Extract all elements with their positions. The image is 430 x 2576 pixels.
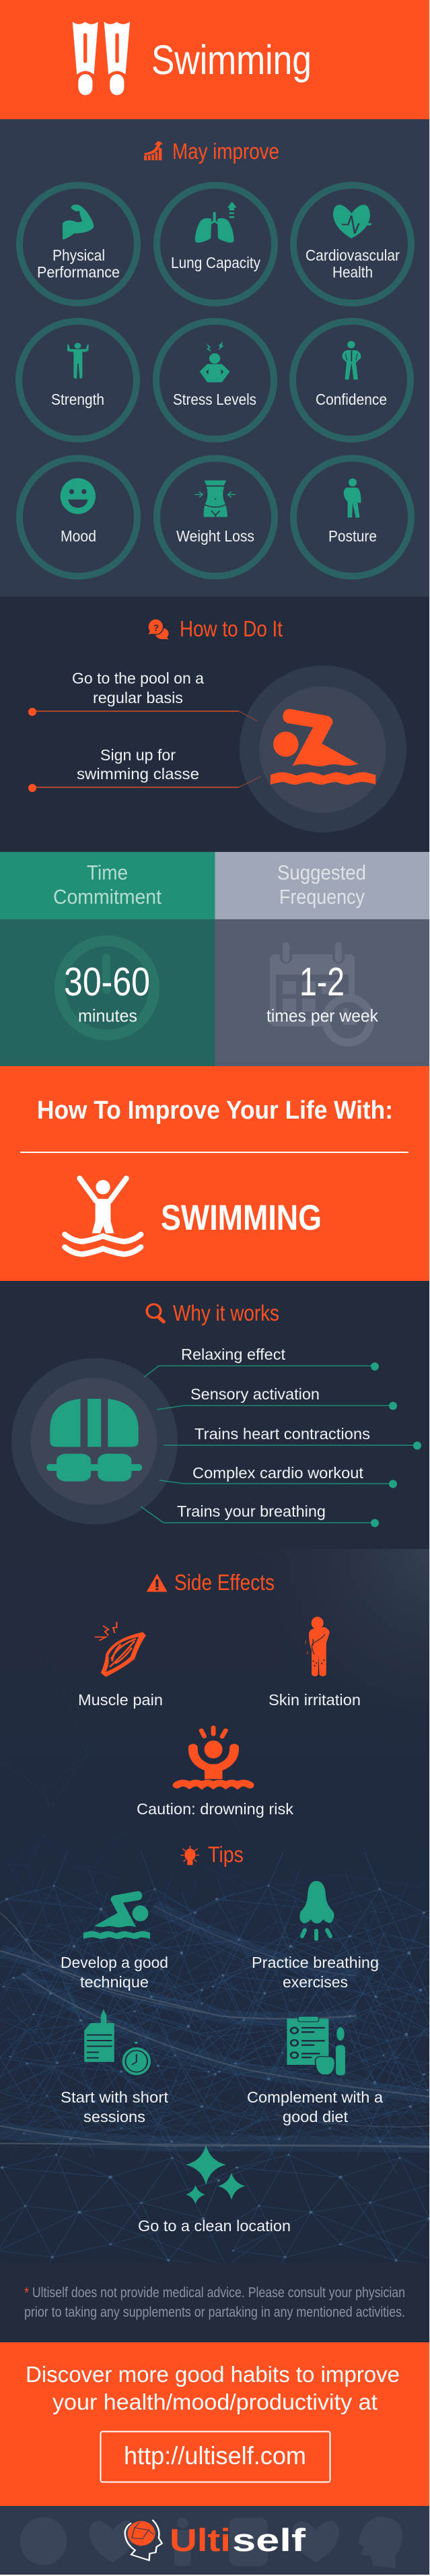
tip: technique <box>61 1891 168 1991</box>
panel: suggested frequency: 1-2 <box>299 960 345 1004</box>
panel: may improve <box>0 119 430 597</box>
panel: time commitment: Time <box>87 861 128 884</box>
step: classes: swimming classe <box>77 765 199 783</box>
label: swimming: SWIMMING <box>161 1198 322 1238</box>
panel: call to action: your health/mood/productivity at <box>52 2389 378 2414</box>
ring: lung capacity: Lung Capacity <box>171 254 260 271</box>
icon: swimmer <box>271 709 375 785</box>
tip: technique: technique <box>80 1973 149 1991</box>
ring: stress levels <box>156 321 274 439</box>
panel: how to do it <box>0 597 430 852</box>
ring: confidence <box>293 321 410 439</box>
heading: side effects: Side Effects <box>174 1570 275 1595</box>
panel: side effects and tips background <box>0 1549 430 2299</box>
heading: how to do it <box>148 616 283 641</box>
tip: short sessions <box>61 2009 169 2125</box>
heading: may improve <box>144 139 279 164</box>
panel: why it works <box>0 1281 430 1549</box>
panel: time commitment <box>0 852 215 1066</box>
panel: time commitment: Commitment <box>53 885 162 909</box>
item: trains your breathing: Trains your breathing <box>177 1502 326 1520</box>
ring: confidence: Confidence <box>316 391 387 408</box>
ring: mood <box>20 458 137 576</box>
concentric circles <box>240 665 406 832</box>
ring: cardiovascular health: Health <box>332 263 373 281</box>
tip: clean location <box>138 2145 291 2235</box>
heading: tips: Tips <box>208 1842 244 1867</box>
ring: cardiovascular health: Cardiovascular <box>306 246 400 264</box>
icon: calendar <box>270 941 370 1043</box>
icon: clock <box>60 941 154 1035</box>
footer <box>0 2506 430 2575</box>
panel: time commitment: 30-60 <box>64 960 150 1004</box>
button: url <box>101 2431 330 2482</box>
panel: time commitment: minutes <box>78 1005 137 1026</box>
header banner <box>0 0 430 119</box>
step: pool <box>28 669 258 721</box>
heading: how to improve: How To Improve Your Life With: <box>37 1096 393 1125</box>
icon: muscle arm <box>63 205 94 240</box>
icon: stressed figure <box>200 341 230 383</box>
icon: strong figure <box>67 343 89 378</box>
icon: confident figure <box>343 341 361 380</box>
tip: diet: Complement with a <box>247 2088 383 2106</box>
tip: technique: Develop a good <box>61 1954 168 1971</box>
icon: waist <box>195 480 236 517</box>
effect: muscle pain: Muscle pain <box>78 1691 163 1709</box>
ring: weight loss <box>157 458 275 576</box>
step: classes: Sign up for <box>100 746 176 764</box>
concentric circles <box>11 1358 178 1525</box>
ring: cardiovascular health <box>293 185 411 303</box>
heading: tips <box>180 1842 244 1867</box>
ring: physical performance <box>20 185 137 303</box>
tip: diet: good diet <box>283 2108 349 2125</box>
ghost icons <box>20 2517 402 2568</box>
heading: how to do it: How to Do It <box>180 616 283 641</box>
tip: breathing <box>252 1881 379 1991</box>
step: pool: Go to the pool on a <box>72 669 204 687</box>
panel: improve your life banner <box>0 1066 430 1281</box>
panel: suggested frequency <box>215 852 430 1066</box>
item: complex cardio workout: Complex cardio workout <box>192 1464 364 1482</box>
heading: may improve: May improve <box>172 139 279 164</box>
ring: physical performance: Physical <box>52 246 105 264</box>
ring: stress levels: Stress Levels <box>173 391 256 408</box>
item: relaxing effect <box>144 1346 379 1377</box>
effect: drowning risk <box>137 1727 294 1818</box>
title: Swimming <box>151 37 312 83</box>
item: trains your breathing <box>141 1502 379 1527</box>
icon: lungs <box>195 201 237 242</box>
step: classes <box>28 746 261 792</box>
ring: physical performance: Performance <box>37 263 120 281</box>
ring: strength <box>19 321 137 439</box>
heading: side effects <box>147 1570 275 1595</box>
item: trains heart contractions: Trains heart contractions <box>194 1425 370 1443</box>
step: pool: regular basis <box>93 689 183 706</box>
effect: drowning risk: Caution: drowning risk <box>137 1800 294 1818</box>
icon: swim cap and goggles <box>46 1399 142 1482</box>
icon: swim fins <box>73 22 130 95</box>
logo <box>125 2520 306 2561</box>
tip: short sessions: Start with short <box>61 2088 169 2106</box>
effect: muscle pain <box>78 1622 163 1709</box>
panel: suggested frequency: Suggested <box>277 861 366 884</box>
item: trains heart contractions <box>164 1425 421 1449</box>
heading: how to do it: ? <box>153 622 159 633</box>
effect: skin irritation <box>268 1617 361 1709</box>
item: sensory activation <box>157 1385 397 1410</box>
icon: smiley <box>61 478 96 514</box>
logo: self <box>232 2522 306 2558</box>
button: url: http://ultiself.com <box>124 2442 306 2470</box>
tip: clean location: Go to a clean location <box>138 2217 291 2235</box>
tip: breathing: exercises <box>283 1973 348 1991</box>
effect: skin irritation: Skin irritation <box>268 1691 361 1709</box>
ring: posture <box>293 458 411 576</box>
panel: call to action: Discover more good habits to improve <box>26 2362 400 2387</box>
ring: lung capacity <box>157 185 275 303</box>
panel: suggested frequency: times per week <box>266 1005 379 1026</box>
heading: why it works: Why it works <box>173 1300 279 1325</box>
ring: weight loss: Weight Loss <box>176 527 254 545</box>
item: sensory activation: Sensory activation <box>190 1385 320 1403</box>
logo: Ulti <box>170 2522 231 2558</box>
icon: heart pulse <box>333 205 371 238</box>
panel: call to action <box>0 2342 430 2506</box>
tip: short sessions: sessions <box>83 2108 145 2125</box>
tip: diet <box>247 2016 383 2125</box>
ring: mood: Mood <box>61 527 96 545</box>
ring: posture: Posture <box>328 527 377 545</box>
icon: person in water <box>65 1179 141 1254</box>
tip: breathing: Practice breathing <box>252 1954 379 1971</box>
icon: standing figure <box>344 478 361 518</box>
panel: disclaimer <box>0 2263 430 2342</box>
item: relaxing effect: Relaxing effect <box>181 1346 286 1363</box>
item: complex cardio workout <box>159 1464 397 1488</box>
panel: suggested frequency: Frequency <box>279 885 365 909</box>
ring: strength: Strength <box>51 391 104 408</box>
